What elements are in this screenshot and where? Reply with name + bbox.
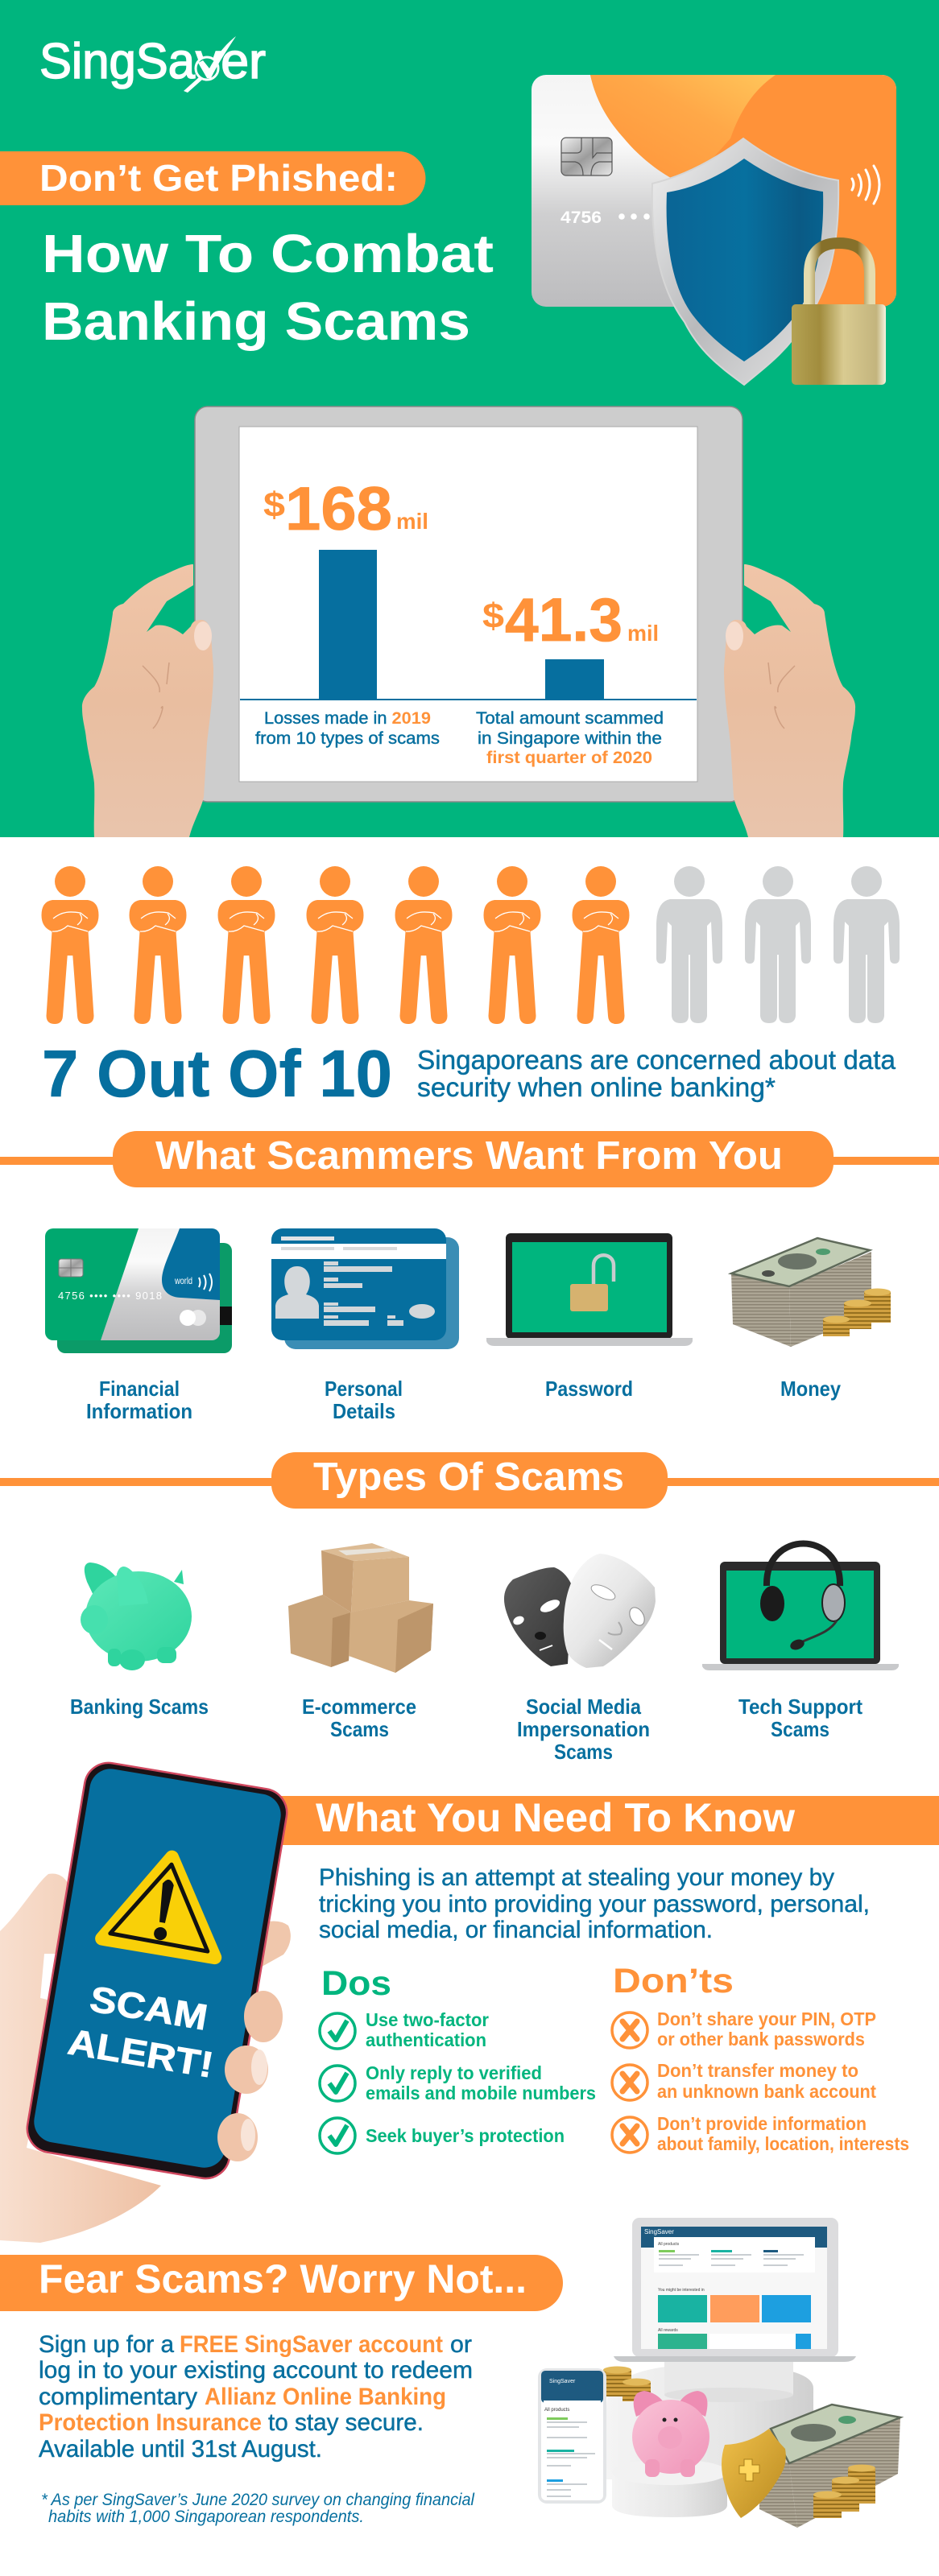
label: Financial Information (86, 1377, 192, 1423)
text: phishing definition (319, 1864, 870, 1943)
label: Tech Support Scams (738, 1695, 862, 1741)
person 2 (129, 866, 187, 1024)
icon: warning triangle (102, 1848, 230, 1958)
icon: money stack and coins (731, 1238, 891, 1347)
axis line (240, 699, 697, 700)
item: personal information: Don’t provide information (657, 2113, 867, 2134)
caption: Q1 2020 amount: first quarter of 2020 (486, 749, 652, 767)
text: sign up offer: to stay secure. (268, 2409, 424, 2436)
footnote: * As per SingSaver’s June 2020 survey on changing financial (41, 2491, 475, 2509)
label: E-commerce Scams (302, 1695, 416, 1741)
icon: cardboard boxes (288, 1543, 433, 1673)
illustration: left hand (82, 564, 213, 837)
logo: SingSaver (39, 34, 266, 93)
caption: 2019 losses (255, 709, 440, 748)
icon: password laptop with open lock (486, 1233, 693, 1346)
text: phishing definition: tricking you into providing your password, personal, (319, 1891, 870, 1918)
item: PIN and passwords: Don’t share your PIN, OTP (657, 2008, 876, 2029)
heading: Types Of Scams (0, 1452, 939, 1509)
money stack (759, 2405, 900, 2528)
icon: financial information card: 4756 •••• •••• 9018 (58, 1290, 162, 1302)
item: two-factor authentication: Use two-factor (366, 2009, 489, 2030)
value: $168 mil: $ (263, 485, 285, 525)
label: Banking Scams: Banking Scams (70, 1695, 209, 1719)
heading: Dos: Dos (321, 1964, 391, 2003)
text: SCAM ALERT: SCAM (87, 1978, 210, 2038)
icon: theatre masks (504, 1554, 656, 1668)
laptop: All products (658, 2242, 680, 2247)
laptop: All rewards (658, 2328, 678, 2333)
item: unknown transfers: an unknown bank account (657, 2081, 876, 2102)
label: Social Media Impersonation Scams: Impersonation (517, 1717, 650, 1741)
text: phishing definition: Phishing is an attempt at stealing your money by (319, 1864, 834, 1891)
phone (23, 1759, 291, 2182)
bar: 2019 losses (319, 550, 377, 700)
value: $41.3 mil: mil (627, 621, 659, 646)
label: E-commerce Scams: E-commerce (302, 1695, 416, 1719)
text: sign up offer: FREE SingSaver account (180, 2331, 443, 2358)
item: unknown transfers (612, 2060, 876, 2102)
footnote (41, 2491, 475, 2526)
label: Social Media Impersonation Scams (517, 1695, 650, 1764)
text: SCAM ALERT (65, 1975, 224, 2086)
icon: green piggy bank (81, 1563, 192, 1670)
icon: personal details ID (271, 1228, 459, 1349)
label: Financial Information: Information (86, 1399, 192, 1423)
item: two-factor authentication (320, 2009, 489, 2050)
value: $168 mil: mil (396, 509, 428, 534)
item: PIN and passwords: or other bank passwords (657, 2029, 865, 2050)
label: Personal Details: Personal (325, 1377, 403, 1401)
label: Password: Password (545, 1377, 633, 1401)
text: sign up offer: or (450, 2331, 472, 2358)
text: data security concern: Singaporeans are concerned about data (417, 1045, 896, 1075)
laptop: SingSaver (644, 2228, 674, 2235)
illustration: hand holding phone (0, 1759, 291, 2243)
caption: Q1 2020 amount (476, 709, 664, 767)
icon: financial information card (45, 1228, 232, 1353)
value: $168 mil (263, 475, 428, 543)
caption: Q1 2020 amount: Total amount scammed (476, 709, 664, 728)
item: buyer's protection (320, 2118, 565, 2153)
value: $41.3 mil: $ (482, 597, 504, 636)
value: $168 mil: 168 (285, 475, 392, 543)
item: verified emails (320, 2062, 596, 2103)
person 6 (483, 866, 541, 1024)
coins behind phone (603, 2367, 651, 2401)
text: sign up offer: complimentary (39, 2384, 197, 2410)
label: Money: Money (780, 1377, 841, 1401)
heading: Fear Scams? Worry Not... (0, 2255, 563, 2311)
text: sign up offer: Protection Insurance (39, 2409, 262, 2436)
heading pill: Don't Get Phished (0, 151, 425, 205)
item: two-factor authentication: authentication (366, 2029, 486, 2050)
pedestals (606, 2359, 813, 2517)
icon: tech support laptop with headset (702, 1544, 899, 1670)
heading: Don'ts: Don’ts (613, 1962, 734, 2000)
item: PIN and passwords (612, 2008, 876, 2050)
icon: credit card with shield and padlock (532, 75, 896, 385)
text: sign up offer: Available until 31st August. (39, 2436, 322, 2462)
phone app: SingSaver (549, 2379, 576, 2384)
heading: What You Need To Know (274, 1795, 939, 1845)
item: unknown transfers: Don’t transfer money to (657, 2060, 858, 2081)
title: How To Combat Banking Scams: Banking Scams (42, 291, 470, 352)
item: personal information (612, 2113, 909, 2154)
heading: Fear Scams? Worry Not...: Fear Scams? Worry Not... (39, 2256, 527, 2301)
panel: Don'ts (612, 1962, 909, 2154)
laptop (614, 2218, 856, 2362)
text: data security concern (417, 1045, 896, 1102)
caption: Q1 2020 amount: in Singapore within the (478, 729, 662, 748)
laptop: You might be interested in (658, 2288, 705, 2293)
label: Tech Support Scams: Scams (771, 1717, 829, 1741)
title: How To Combat Banking Scams: How To Combat (42, 224, 494, 284)
value: $41.3 mil (482, 586, 659, 654)
title: How To Combat Banking Scams (42, 224, 494, 352)
text: sign up offer: Allianz Online Banking (205, 2384, 446, 2410)
text: data security concern: security when online banking* (417, 1072, 776, 1102)
text: sign up offer (39, 2331, 473, 2462)
label: Social Media Impersonation Scams: Scams (554, 1740, 613, 1764)
person 9 grey (745, 866, 811, 1023)
pictogram: 7 out of 10 people (42, 866, 900, 1024)
person 8 grey (656, 866, 722, 1023)
bar: Q1 2020 losses (545, 659, 604, 700)
text: SCAM ALERT: ALERT! (65, 2021, 217, 2086)
person 4 (306, 866, 364, 1024)
heading: What Scammers Want From You (0, 1131, 939, 1187)
label: Financial Information: Financial (99, 1377, 180, 1401)
panel: green header (0, 0, 939, 837)
label: Social Media Impersonation Scams: Social Media (526, 1695, 641, 1719)
pink piggy bank (632, 2391, 709, 2477)
text: phishing definition: social media, or financial information. (319, 1917, 713, 1943)
caption: 2019 losses: from 10 types of scams (255, 729, 440, 748)
item: verified emails: Only reply to verified (366, 2062, 542, 2083)
heading: Types Of Scams: Types Of Scams (313, 1455, 624, 1499)
panel: tablet (195, 407, 743, 802)
label: Personal Details: Details (333, 1399, 395, 1423)
label: E-commerce Scams: Scams (330, 1717, 389, 1741)
bar chart: scam losses (240, 475, 697, 767)
person 5 (395, 866, 453, 1024)
icon: financial information card: world (174, 1275, 192, 1286)
heading: What You Need To Know: What You Need To Know (316, 1795, 795, 1840)
heading: What Scammers Want From You: What Scammers Want From You (155, 1134, 783, 1178)
stat: 7 Out Of 10: 7 Out Of 10 (42, 1036, 392, 1111)
value: $41.3 mil: 41.3 (505, 586, 623, 654)
person 7 (572, 866, 630, 1024)
item: verified emails: emails and mobile numbers (366, 2083, 596, 2103)
panel: Dos (320, 1964, 596, 2153)
footnote: habits with 1,000 Singaporean respondents. (48, 2508, 364, 2526)
illustration: SingSaver account on devices with pedestal (538, 2218, 900, 2528)
illustration: right hand (724, 564, 855, 837)
logo: SingSaver: ver (196, 34, 266, 89)
text: sign up offer: Sign up for a (39, 2331, 174, 2358)
icon: credit card with shield and padlock: 4756 (561, 208, 602, 227)
label: Personal Details (325, 1377, 403, 1423)
phone app: All products (544, 2408, 569, 2413)
heading pill: Don't Get Phished: Don’t Get Phished: (39, 157, 398, 199)
label: Tech Support Scams: Tech Support (738, 1695, 862, 1719)
item: personal information: about family, location, interests (657, 2133, 909, 2154)
text: sign up offer: log in to your existing account to redeem (39, 2357, 473, 2384)
phone app (538, 2368, 606, 2504)
gold shield (722, 2429, 786, 2518)
person 3 (217, 866, 275, 1024)
person 1 (42, 866, 98, 1024)
item: buyer's protection: Seek buyer’s protection (366, 2125, 565, 2146)
caption: 2019 losses: Losses made in 2019 (264, 709, 431, 728)
person 10 grey (834, 866, 900, 1023)
fingers (217, 1991, 283, 2161)
logo: SingSaver: SingSa (39, 34, 195, 89)
